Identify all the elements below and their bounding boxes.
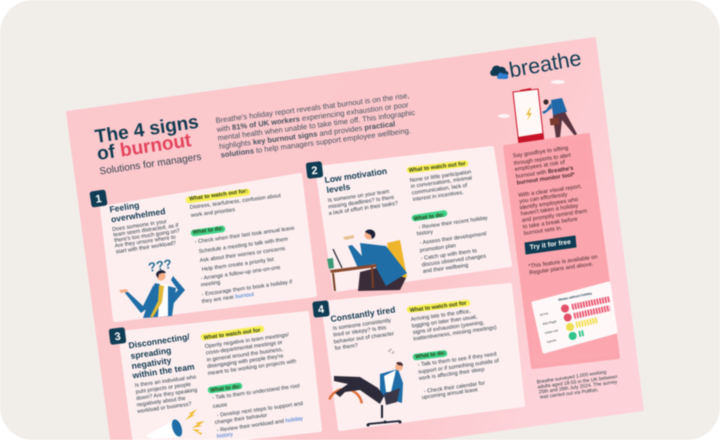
card 2 what to do: - Assess their development/: [419, 231, 488, 246]
card 3 what to do: - Talk to them to understand the root: [212, 383, 301, 401]
card 2 watch out: in conversations, minimal: [410, 175, 472, 190]
monitor text: to take a break before: [522, 217, 578, 230]
card 4 heading and question: [330, 304, 396, 352]
card 4 watch out: Arriving late to the office,: [410, 309, 472, 323]
chart: weeks without holiday: Ayesha: [546, 338, 557, 344]
card 2 what to do: history: [416, 229, 434, 237]
card 4 watch out: What to watch out for: [409, 300, 468, 314]
card 3 what to do: change their behavior: [214, 413, 268, 426]
card 1 watch out: [189, 188, 282, 219]
number badge 1: 1: [95, 193, 103, 206]
card 2 watch out: None or little participation: [409, 169, 472, 184]
intro text: solutions to help managers support employee wellbeing.: [220, 126, 411, 159]
card 3 watch out: in general around the business,: [206, 347, 284, 363]
card 3 watch out: cross-departmental meetings or: [205, 340, 283, 356]
card 1 what to do: What to do:: [192, 226, 224, 236]
illustration: man asleep in chair: [328, 348, 403, 426]
card 1 what to do: Help them create a priority list: [201, 257, 275, 273]
card 1 heading and question: [109, 200, 180, 255]
chart: weeks without holiday: [533, 283, 616, 352]
card 4 what to do: [415, 350, 500, 401]
card 1 heading and question: Feeling: [109, 200, 140, 214]
card 1 watch out: Distress, tearfulness, confusion about: [189, 193, 282, 211]
illustration: confused man: [119, 256, 185, 318]
card 3 watch out: disengaging with people they're: [207, 353, 284, 370]
card 3 heading and question: puts projects or people: [135, 382, 191, 395]
card 2 what to do: discuss observed changes: [421, 253, 487, 268]
card 1 heading and question: team seem distracted, as if: [113, 223, 179, 238]
card 4 heading and question: Constantly tired: [330, 304, 396, 324]
number badge 4: 4: [317, 304, 326, 316]
button: try it for free: [525, 236, 576, 254]
monitor text: Say goodbye to sifting: [512, 145, 569, 159]
card 1 watch out: What to watch out for:: [189, 188, 248, 202]
card 4 watch out: signs of exhaustion (yawning,: [412, 320, 485, 336]
card 4 watch out: inattentiveness, missing meetings): [413, 325, 497, 342]
card 3 watch out: What to watch out for: [203, 327, 262, 341]
panel: burnout monitor: [505, 135, 618, 367]
card 3 what to do: - Develop next steps to support and: [216, 401, 303, 419]
icon: clouds: [498, 80, 565, 118]
card 4 what to do: - Talk to them to see if they need: [417, 351, 497, 368]
card 4 what to do: support or if something outside of: [418, 358, 500, 375]
document page: [67, 38, 643, 439]
card 2 what to do: - Review their recent holiday: [418, 215, 488, 231]
card 1 heading and question: Does someone in your: [112, 219, 167, 233]
card 4 what to do: work is affecting their sleep: [417, 367, 485, 382]
card 2 what to do: What to do:: [413, 212, 445, 222]
intro text: with 81% of UK workers experiencing exhaustion or poor: [215, 100, 410, 134]
monitor text: [512, 145, 588, 237]
chart: weeks without holiday: Eliot Rigge: [542, 319, 557, 326]
number badge 3: 3: [114, 331, 121, 343]
card 3 heading and question: negatively about the: [136, 396, 186, 408]
illustration: megaphone: [146, 409, 208, 439]
card 1 watch out: work and priorities: [189, 207, 236, 219]
footnote: Regular plans and above.: [529, 261, 594, 276]
card 2 heading and question: missing deadlines? Is there: [328, 195, 395, 210]
card 2 watch out: What to watch out for: [409, 161, 467, 174]
card 3 heading and question: spreading: [130, 345, 172, 361]
card 4 what to do: - Check their calendar for: [423, 380, 486, 395]
card 3 what to do: [210, 383, 304, 440]
card 3 what to do: What to do:: [210, 384, 241, 394]
card 1 heading and question: start with their workload?: [115, 241, 176, 255]
intro text: mental health when unable to take time off. This infographic: [217, 108, 416, 142]
title: The 4 signs: [94, 112, 200, 148]
monitor text: burnout with Breathe's: [515, 166, 574, 180]
card 3 what to do: history: [216, 432, 234, 440]
number badge 3: [109, 327, 126, 345]
card 3 heading and question: [128, 331, 198, 415]
card 4 what to do: What to do:: [415, 350, 446, 360]
icon: battery: [513, 88, 544, 145]
number badge 2: [306, 161, 323, 179]
illustration: confused man: ???: [147, 256, 173, 275]
monitor text: With a clear visual report,: [518, 184, 583, 199]
card 3 heading and question: Is there an individual who: [134, 374, 197, 389]
logo: breathe: breathe: [507, 46, 583, 82]
card 1 what to do: - Check when their last took annual leave: [194, 226, 295, 245]
panel: card 4 constantly tired: [312, 285, 523, 429]
card 1 what to do: Schedule a meeting to talk with them: [198, 236, 289, 255]
survey footnote: adults aged 18-55 in the UK between: [537, 374, 618, 390]
card 2 what to do: and their wellbeing: [422, 263, 469, 275]
icon: businessman pushing battery: [542, 98, 577, 138]
illustration: man at desk: [327, 229, 407, 291]
card 1 what to do: Ask about their worries or concerns: [199, 246, 286, 264]
card 3 what to do: cause: [212, 402, 228, 410]
card 4 watch out: [409, 300, 497, 342]
number badge 1: [89, 189, 108, 208]
monitor text: employees at risk of: [514, 160, 566, 173]
card 1 what to do: [192, 226, 295, 305]
chart: weeks without holiday: Weeks without holiday: [558, 291, 593, 302]
card 2 heading and question: Is someone on your team: [327, 189, 390, 204]
card 2 what to do: promotion plan: [419, 243, 456, 254]
card 2 what to do: - Catch up with them to: [420, 248, 477, 262]
footnote: *This feature is available on: [528, 254, 598, 270]
card 2 watch out: communication, lack of: [411, 183, 468, 196]
button: try it for free: Try it for free: [529, 239, 572, 251]
card 3 heading and question: negativity: [131, 355, 172, 371]
chart: weeks without holiday: Urban Lee: [544, 328, 559, 335]
card 1 what to do: meeting: [200, 280, 221, 288]
card 2 heading and question: [324, 166, 398, 217]
card 2 heading and question: Low motivation: [324, 166, 388, 185]
card 3 watch out: Openly negative in team meetings/: [204, 332, 290, 350]
card 1 heading and question: there's too much going on?: [114, 228, 180, 244]
survey footnote: Breathe surveyed 1,000 working: [536, 369, 607, 385]
card 1 what to do: they are near burnout: [201, 292, 255, 305]
card 2 watch out: interest in incentives.: [412, 190, 465, 203]
intro text: [215, 91, 416, 159]
card 3 heading and question: workload or business?: [136, 401, 192, 415]
panel: card 2 low motivation: [306, 148, 510, 291]
monitor text: and promptly remind them: [521, 208, 588, 224]
monitor text: burnout monitor tool*: [516, 172, 576, 186]
chart: weeks without holiday: Ali Kar: [539, 311, 549, 317]
card 3 heading and question: within the team: [131, 361, 196, 381]
title: [94, 112, 202, 177]
card 2 heading and question: a lack of effort in their tasks?: [328, 201, 398, 217]
card 4 what to do: upcoming annual leave: [421, 387, 478, 401]
card 3 heading and question: Disconnecting/: [128, 331, 191, 350]
survey footnote: 25th and 26th July 2024. The survey: [538, 379, 618, 395]
survey footnote: was carried out via Pollfish.: [540, 387, 599, 400]
card 4 heading and question: tired or sleepy? Is this: [333, 325, 387, 338]
illustration: man asleep in chair: Z z: [388, 348, 396, 355]
card 2 what to do: [413, 212, 488, 275]
card 4 watch out: logging on later than usual,: [411, 314, 478, 329]
card 3 what to do: - Review their workload and holiday: [216, 416, 304, 434]
monitor text: burnout sets in.: [523, 225, 563, 237]
monitor text: identify employees who: [519, 197, 579, 211]
panel: card 3 disconnecting: [109, 313, 320, 440]
title: Solutions for managers: [99, 152, 202, 177]
card 2 watch out: [409, 161, 472, 203]
card 3 heading and question: down? Are they speaking: [136, 387, 198, 402]
card 1 what to do: - Arrange a follow-up one-on-one: [200, 265, 281, 282]
monitor text: haven't taken a holiday: [520, 203, 579, 217]
intro text: Breathe's holiday report reveals that burnout is on the rise,: [215, 91, 410, 125]
card 4 heading and question: behavior out of character: [333, 331, 395, 345]
card 4 heading and question: for them?: [334, 343, 358, 352]
number badge 2: 2: [311, 165, 318, 177]
card 4 heading and question: Is someone consistently: [332, 318, 392, 332]
card 1 what to do: - Encourage them to book a holiday if: [201, 279, 293, 298]
card 3 watch out: meant to be working on projects with: [207, 359, 297, 377]
intro text: highlights key burnout signs and provides practical: [219, 119, 396, 151]
card 1 heading and question: Are they unsure where to: [114, 234, 176, 249]
number badge 4: [312, 300, 330, 318]
card 3 watch out: [203, 327, 297, 377]
survey footnote: [536, 369, 618, 400]
card 2 heading and question: levels: [326, 182, 351, 195]
card 1 heading and question: overwhelmed: [110, 206, 166, 224]
monitor text: you can effortlessly: [519, 192, 568, 205]
monitor text: through reports to alert: [513, 153, 572, 167]
title: of burnout: [96, 130, 193, 165]
panel: card 1 feeling overwhelmed: [89, 175, 315, 320]
